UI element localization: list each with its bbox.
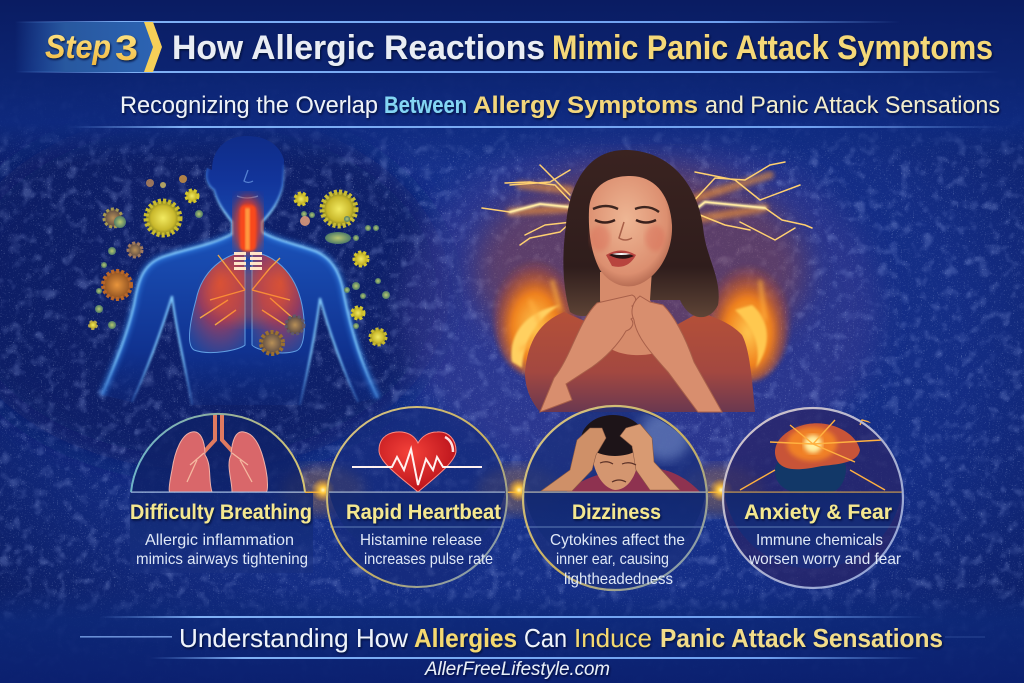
description: inner ear, causing: [556, 551, 669, 568]
subtitle: Recognizing the Overlap: [120, 92, 378, 119]
description: Cytokines affect the: [550, 532, 685, 549]
illustration: distressed woman with flames and lightning: [475, 150, 812, 412]
panel: anxiety and fear: [723, 408, 903, 588]
closing statement: Can: [524, 623, 567, 653]
title text: How Allergic Reactions: [172, 29, 545, 67]
description: [550, 532, 685, 588]
description: Immune chemicals: [756, 532, 883, 549]
subtitle: Allergy Symptoms: [473, 92, 698, 119]
body silhouette: [102, 136, 378, 405]
description: Allergic inflammation: [145, 532, 294, 549]
icon: person holding head: [541, 409, 700, 492]
illustration: human body with inflamed airway and lungs: [102, 136, 378, 405]
shirt: [525, 312, 755, 412]
face: [589, 176, 672, 286]
neck and chest: [600, 270, 668, 355]
inflamed airway: [234, 197, 262, 270]
closing statement: Allergies: [414, 623, 517, 653]
step badge: 3: [115, 29, 138, 68]
icon: lungs: [168, 414, 268, 492]
subtitle: and Panic Attack Sensations: [705, 92, 1000, 119]
footer: [80, 616, 985, 680]
description: worsen worry and fear: [748, 551, 902, 568]
heading: Anxiety & Fear: [744, 500, 893, 524]
connector glow points: [281, 466, 763, 514]
step badge: Step: [45, 28, 111, 65]
icon: glowing brain: [740, 420, 885, 492]
closing statement: [179, 623, 943, 653]
heading: Rapid Heartbeat: [346, 500, 501, 524]
closing statement: Induce: [574, 623, 652, 653]
heading: Difficulty Breathing: [130, 500, 312, 524]
description: [136, 532, 308, 568]
description: Histamine release: [360, 532, 482, 549]
hair: [563, 150, 719, 317]
description: [360, 532, 493, 568]
lungs: [190, 252, 304, 353]
flames and aura: [475, 165, 805, 382]
panel: dizziness: [522, 405, 708, 591]
step badge: [15, 22, 162, 72]
description: [748, 532, 902, 568]
closing statement: Panic Attack Sensations: [660, 623, 943, 653]
hands at throat: [540, 295, 722, 412]
subtitle: [120, 92, 1000, 119]
panel: rapid heartbeat: [326, 406, 508, 588]
icon: heart with pulse: [352, 432, 482, 492]
description: increases pulse rate: [364, 551, 493, 568]
description: lightheadedness: [564, 571, 673, 588]
lightning bolts: [482, 162, 812, 245]
title banner: [15, 21, 1000, 73]
website: AllerFreeLifestyle.com: [424, 659, 610, 680]
heading: Dizziness: [572, 500, 661, 524]
panel: difficulty breathing: [130, 405, 313, 573]
description: mimics airways tightening: [136, 551, 308, 568]
pollen particles: [89, 175, 390, 354]
subtitle: Between: [384, 92, 467, 119]
closing statement: Understanding How: [179, 623, 408, 653]
title text: [172, 29, 993, 67]
